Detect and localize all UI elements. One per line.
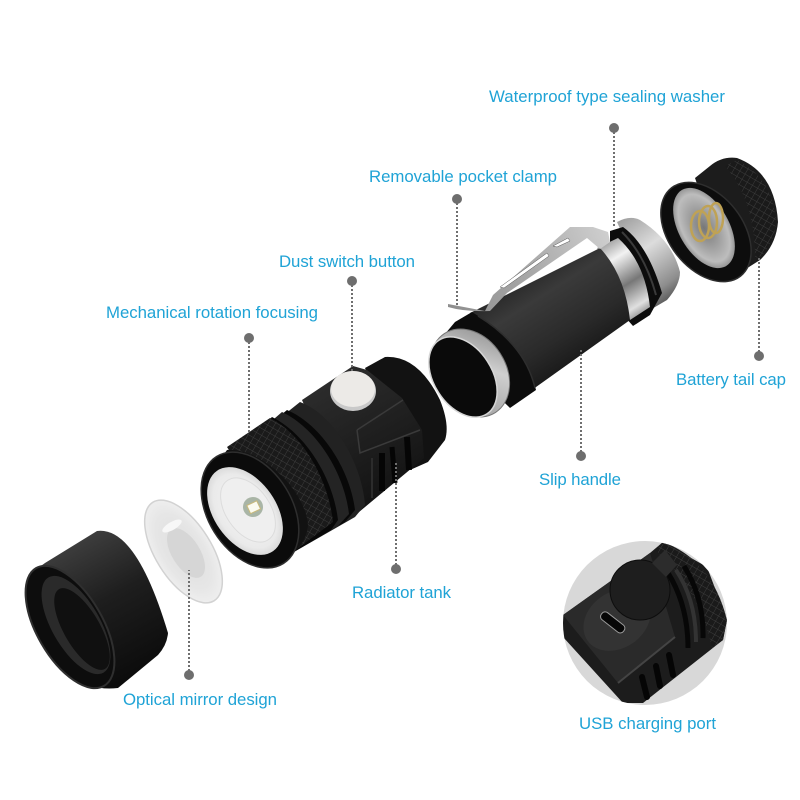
leader: washer [613, 128, 615, 226]
silver reflector disc [192, 453, 298, 569]
micro USB port [600, 611, 626, 634]
leader: switch [351, 281, 353, 372]
dot: focus [244, 333, 254, 343]
label: radiator: Radiator tank [352, 583, 452, 602]
label: focus: Mechanical rotation focusing [106, 303, 318, 322]
label: clamp: Removable pocket clamp [369, 167, 557, 186]
dot: radiator [391, 564, 401, 574]
leader: radiator [395, 463, 397, 569]
cooling fins [372, 437, 409, 498]
label: tail cap: Battery tail cap [676, 370, 786, 389]
LED emitter [243, 497, 263, 517]
head rear flange [365, 357, 447, 470]
brass contact spring [691, 203, 723, 241]
dot: handle [576, 451, 586, 461]
leader: handle [580, 350, 582, 456]
dot: switch [347, 276, 357, 286]
front bezel [205, 450, 308, 566]
black barrel [470, 248, 630, 402]
label: handle: Slip handle [539, 470, 621, 489]
inset body [563, 542, 727, 703]
knurled focus ring [227, 418, 333, 552]
rubber port cover [610, 550, 677, 620]
leader: tail cap [758, 256, 760, 356]
leader: lens [188, 570, 190, 675]
power switch button [330, 371, 376, 411]
label: switch: Dust switch button [279, 252, 415, 271]
label: USB: USB charging port [579, 714, 716, 733]
leader: focus [248, 338, 250, 432]
label: lens: Optical mirror design [123, 690, 277, 709]
dot: lens [184, 670, 194, 680]
front thread and opening [440, 312, 536, 408]
head body with flat top [302, 366, 424, 517]
part: handle tube [414, 218, 680, 432]
inset grooves [668, 566, 703, 648]
head rings [215, 402, 365, 560]
dot: clamp [452, 194, 462, 204]
pocket clamp [448, 227, 610, 311]
exploded flashlight infographic [24, 90, 786, 732]
inset knurl ring [655, 542, 727, 648]
label: washer: Waterproof type sealing washer [489, 87, 725, 106]
inset fins [642, 655, 673, 697]
part: front lens cap [7, 531, 168, 702]
part: flashlight head [181, 357, 447, 586]
part: battery tail cap [642, 158, 778, 299]
dot: washer [609, 123, 619, 133]
inset: USB charging port close-up [563, 541, 727, 705]
part: optical lens [129, 487, 238, 616]
inset port recess [584, 592, 650, 650]
chrome collar [597, 238, 650, 320]
rear threaded end [617, 218, 680, 310]
leader: clamp [456, 199, 458, 305]
dot: tail cap [754, 351, 764, 361]
